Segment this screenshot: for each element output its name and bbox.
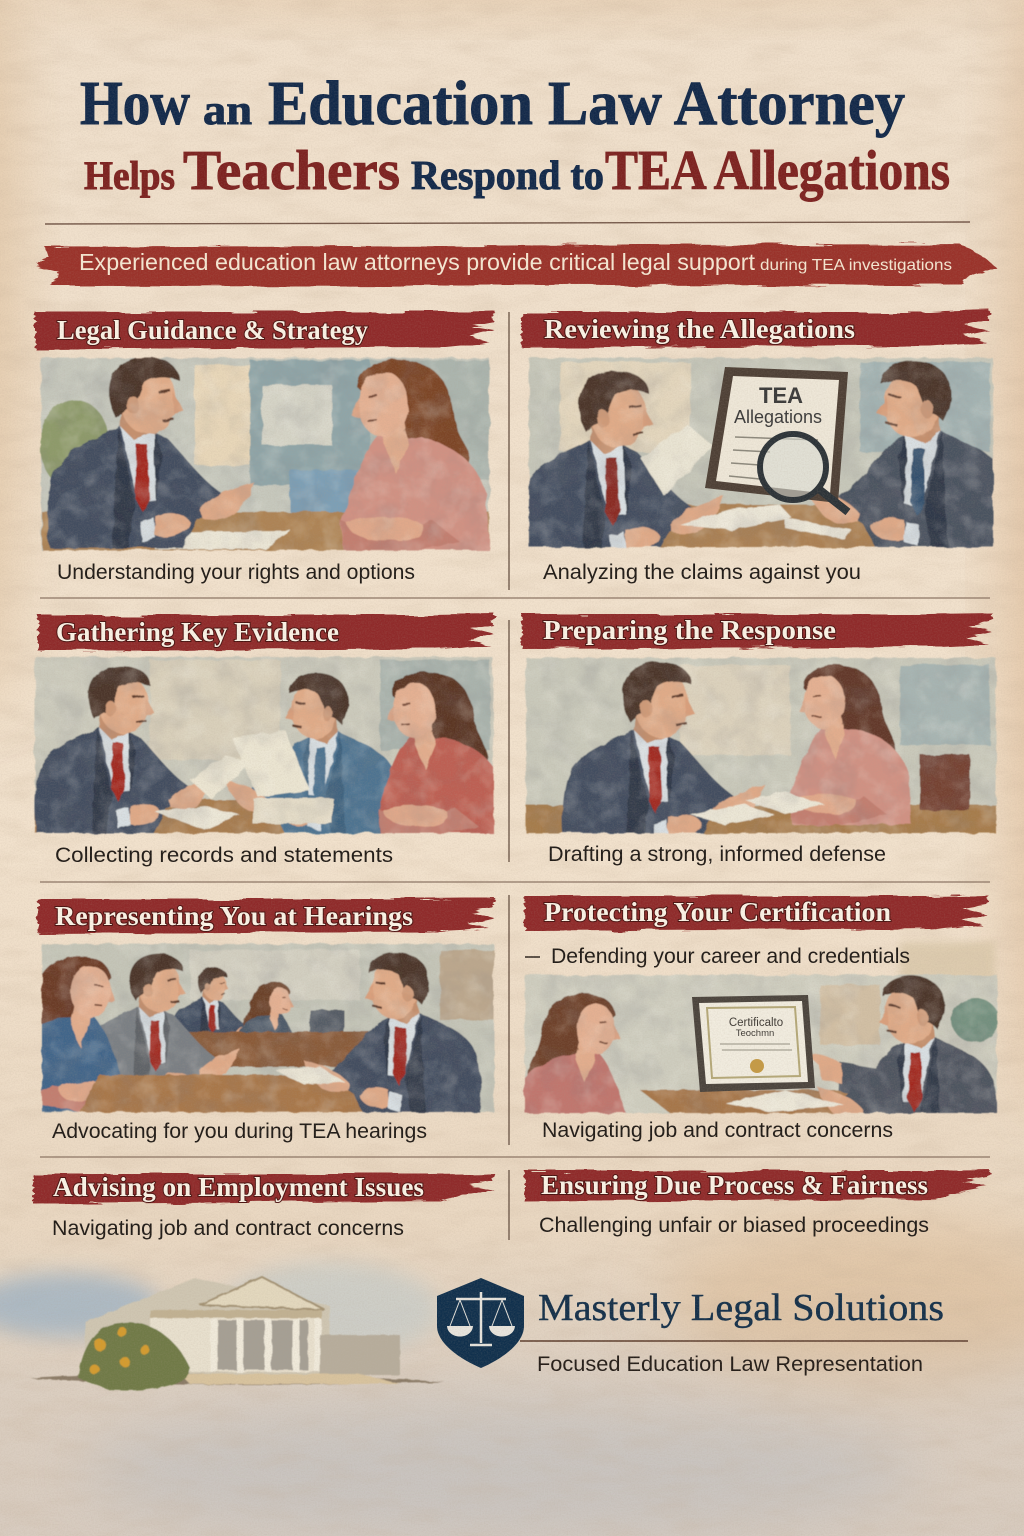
heading: legal guidance [35, 311, 495, 349]
caption: Challenging unfair or biased proceedings [539, 1214, 929, 1237]
panel: protecting your certification [522, 894, 998, 1115]
caption: Understanding your rights and options [57, 561, 415, 584]
panel: ensuring due process and fairness [525, 1170, 990, 1237]
title: Respond to [411, 152, 604, 198]
icon: framed teaching certificate: Teochmn [736, 1028, 774, 1039]
illustration: attorney and teacher at table [40, 357, 490, 556]
icon: framed teaching certificate [692, 995, 815, 1092]
heading: certification: Protecting Your Certification [544, 897, 891, 927]
icon: TEA allegations clipboard with magnifier: TEA [759, 383, 803, 408]
title: Helps [84, 153, 175, 198]
panel: reviewing the allegations [518, 310, 1012, 562]
faded top of illustration behind sub-caption [900, 942, 995, 982]
sub-caption: defending career: Defending your career and credentials [551, 945, 910, 968]
heading: legal guidance: Legal Guidance & Strategy [57, 315, 368, 345]
heading: response [522, 613, 993, 649]
panel: advising on employment issues [33, 1172, 495, 1240]
subtitle banner [36, 244, 997, 286]
caption: Collecting records and statements [55, 844, 393, 867]
illustration: attorney with two clients and documents [35, 657, 505, 839]
subtitle banner: Experienced education law attorneys provide critical legal support [79, 249, 756, 275]
caption: Navigating job and contract concerns [542, 1119, 893, 1142]
heading: due process: Ensuring Due Process & Fairness [541, 1170, 928, 1200]
caption: Advocating for you during TEA hearings [52, 1120, 427, 1143]
icon: TEA allegations clipboard with magnifier [705, 367, 848, 512]
heading: hearings: Representing You at Hearings [55, 901, 413, 931]
title: TEA Allegations [605, 140, 950, 202]
illustration: law firm building with sky and shrub [0, 1262, 445, 1390]
title: Education Law Attorney [268, 70, 905, 138]
illustration: hearing room [5, 944, 494, 1117]
illustration: reviewing TEA allegations clipboard [528, 356, 995, 550]
brand tagline: Focused Education Law Representation [537, 1353, 923, 1376]
caption: Navigating job and contract concerns [52, 1217, 404, 1240]
heading: hearings [38, 898, 495, 934]
icon: TEA allegations clipboard with magnifier: Allegations [734, 407, 822, 427]
caption: Drafting a strong, informed defense [548, 843, 886, 866]
panel: representing you at hearings [5, 898, 495, 1117]
heading: evidence [38, 614, 495, 651]
panel: gathering key evidence [35, 614, 505, 839]
panel: legal guidance and strategy [35, 311, 495, 556]
illustration: certificate review [522, 974, 998, 1115]
heading: reviewing: Reviewing the Allegations [544, 314, 855, 344]
brand name: Masterly Legal Solutions [538, 1287, 944, 1329]
title [80, 70, 950, 202]
title: How [80, 70, 190, 138]
heading: employment: Advising on Employment Issues [53, 1172, 424, 1202]
subtitle banner: during TEA investigations [760, 257, 952, 274]
heading: reviewing [522, 310, 990, 348]
illustration: drafting with a client [526, 658, 996, 849]
heading: response: Preparing the Response [543, 615, 836, 645]
heading: evidence: Gathering Key Evidence [56, 617, 339, 647]
title: Teachers [183, 140, 400, 202]
caption: Analyzing the claims against you [543, 561, 861, 584]
panel: preparing the response [522, 613, 996, 849]
icon: framed teaching certificate: Certificalto [729, 1017, 783, 1029]
heading: certification [525, 895, 988, 931]
logo: shield with scales of justice [437, 1278, 524, 1368]
title: an [203, 88, 252, 134]
